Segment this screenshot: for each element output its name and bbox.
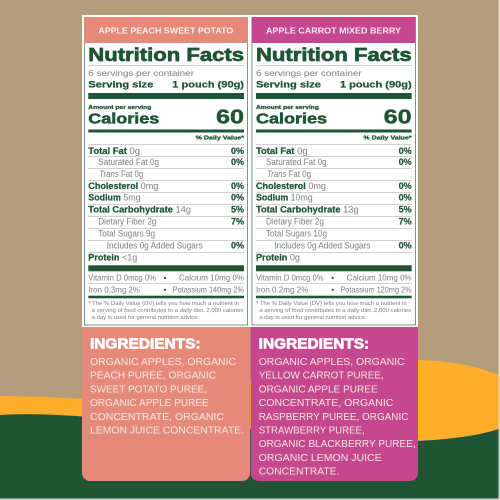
nutrient rows right (256, 146, 412, 263)
panel: ingredients apple carrot mixed berry (251, 320, 418, 481)
nutrient rows right: Includes 0g Added Sugars (274, 241, 371, 251)
footnote right (256, 301, 412, 321)
header band right (252, 17, 416, 43)
vitamins right: Calcium 10mg 0% (347, 273, 412, 283)
panel: nutrition facts apple peach sweet potato (84, 17, 248, 325)
nutrient rows left: Sodium 5mg (88, 193, 141, 203)
nutrient rows left: Total Fat 0g (88, 146, 140, 156)
ingredients text right: RASPBERRY PUREE, ORGANIC (259, 411, 409, 423)
vitamins left: Potassium 140mg 2% (173, 285, 245, 295)
ingredients text left: PEACH PUREE, ORGANIC (90, 370, 216, 382)
calories right: Amount per serving (256, 105, 319, 111)
footnote right: * The % Daily Value (DV) tells you how much a nutrient in (256, 301, 407, 307)
nutrient rows left: Total Sugars 9g (98, 229, 155, 239)
servings right: 6 servings per container (256, 68, 362, 78)
serving size left: 1 pouch (90g) (172, 79, 244, 89)
nutrient rows left: Trans Fat 0g (99, 169, 143, 179)
calories left (88, 105, 244, 142)
vitamins right: Vitamin D 0mcg 0% (256, 273, 324, 283)
heading: ingredients right: INGREDIENTS: (259, 335, 369, 352)
ingredients text right: ORGANIC BLACKBERRY PUREE, (259, 438, 416, 450)
ingredients text left: SWEET POTATO PUREE, (90, 383, 207, 395)
calories right: 60 (384, 107, 412, 129)
ingredients text right: STRAWBERRY PUREE, (259, 424, 365, 436)
title left: Nutrition Facts (88, 44, 244, 65)
footnote left: a day is used for general nutrition advice. (92, 315, 199, 321)
vitamins right: • (331, 273, 334, 283)
ingredients text right: CONCENTRATE, ORGANIC (259, 397, 394, 409)
servings left: 6 servings per container (88, 68, 194, 78)
calories left: Calories (88, 112, 159, 128)
footnote left: a serving of food contributes to a daily diet. 2,000 calories (92, 308, 244, 314)
vitamins right (256, 273, 412, 295)
heading: ingredients left: INGREDIENTS: (90, 335, 200, 352)
nutrient rows right: 0% (399, 146, 412, 156)
nutrient rows left: Protein <1g (88, 253, 137, 263)
footnote left (88, 301, 244, 321)
header band left: APPLE PEACH SWEET POTATO (98, 25, 234, 35)
vitamins right: Potassium 120mg 2% (340, 285, 412, 295)
nutrient rows left: 0% (231, 181, 244, 191)
calories left: Amount per serving (88, 105, 151, 111)
nutrient rows right: Total Fat 0g (256, 146, 308, 156)
nutrient rows right: Dietary Fiber 2g (266, 217, 324, 227)
panel: ingredients apple peach sweet potato (82, 320, 250, 481)
ingredients text left: ORGANIC APPLES, ORGANIC (90, 356, 236, 368)
calories left: 60 (216, 107, 244, 129)
vitamins left: Vitamin D 0mcg 0% (88, 273, 157, 283)
nutrient rows right: 0% (399, 181, 412, 191)
ingredients text left (90, 356, 244, 436)
nutrient rows left: 0% (231, 157, 244, 167)
serving size right (256, 79, 412, 89)
vitamins left: Calcium 10mg 0% (179, 273, 245, 283)
nutrient rows right: Trans Fat 0g (267, 169, 311, 179)
title right: Nutrition Facts (256, 44, 412, 65)
header band right: APPLE CARROT MIXED BERRY (266, 25, 401, 35)
nutrient rows right: 0% (399, 157, 412, 167)
ingredients text right: ORGANIC APPLE PUREE (259, 383, 378, 395)
ingredients text right: ORGANIC LEMON JUICE (259, 452, 382, 464)
nutrient rows right: Saturated Fat 0g (266, 157, 327, 167)
thick bars right (256, 93, 412, 298)
ingredients text right (259, 356, 416, 478)
nutrient rows left: Total Carbohydrate 14g (88, 205, 191, 215)
serving size right: 1 pouch (90g) (340, 79, 412, 89)
nutrient rows left: 7% (231, 217, 244, 227)
ingredients text left: ORGANIC APPLE PUREE (90, 397, 209, 409)
rules right (256, 65, 412, 283)
nutrient rows right: Total Carbohydrate 13g (256, 205, 359, 215)
ingredients text right: ORGANIC APPLES, ORGANIC (259, 356, 405, 368)
nutrient rows right: 5% (399, 205, 412, 215)
nutrient rows left (88, 146, 244, 263)
vitamins right: Iron 0.2mg 2% (256, 285, 309, 295)
vitamins right: • (331, 285, 334, 295)
nutrient rows left: Includes 0g Added Sugars (107, 241, 203, 251)
calories left: % Daily Value* (196, 136, 244, 142)
panel: nutrition facts apple carrot mixed berry (252, 17, 416, 325)
ingredients text right: CONCENTRATE. (259, 466, 339, 478)
footnote left: * The % Daily Value (DV) tells you how much a nutrient in (88, 301, 239, 307)
nutrient rows left: Dietary Fiber 2g (98, 217, 156, 227)
footnote right: a serving of food contributes to a daily diet. 2,000 calories (259, 308, 412, 314)
vitamins left: • (164, 285, 167, 295)
rules left (88, 65, 244, 283)
vitamins left: • (164, 273, 167, 283)
label border left (84, 17, 248, 325)
nutrient rows left: 0% (231, 241, 244, 251)
serving size left (88, 79, 244, 89)
calories right: Calories (256, 112, 327, 128)
nutrient rows left: 0% (231, 193, 244, 203)
white card backing (82, 15, 418, 327)
nutrient rows left: 0% (231, 146, 244, 156)
nutrient rows left: Cholesterol 0mg (88, 181, 158, 191)
footnote right: a day is used for general nutrition advice. (259, 315, 367, 321)
nutrient rows right: 0% (399, 193, 412, 203)
nutrient rows right: Protein 0g (256, 253, 300, 263)
vitamins left (88, 273, 245, 295)
nutrient rows right: 7% (399, 217, 412, 227)
nutrient rows right: 0% (399, 241, 412, 251)
ingredients text left: CONCENTRATE, ORGANIC (90, 411, 224, 423)
ingredients text left: LEMON JUICE CONCENTRATE. (90, 424, 244, 436)
serving size left: Serving size (88, 79, 153, 89)
calories right: % Daily Value* (363, 136, 412, 142)
nutrient rows right: Cholesterol 0mg (256, 181, 326, 191)
header band left (84, 17, 248, 43)
nutrient rows left: 5% (231, 205, 244, 215)
serving size right: Serving size (256, 79, 321, 89)
thick bars left (88, 93, 244, 298)
ingredients text right: YELLOW CARROT PUREE, (259, 370, 384, 382)
nutrient rows right: Sodium 10mg (256, 193, 313, 203)
label border right (252, 17, 415, 325)
calories right (256, 105, 412, 142)
nutrient rows right: Total Sugars 10g (266, 229, 327, 239)
nutrient rows left: Saturated Fat 0g (98, 157, 159, 167)
vitamins left: Iron 0.3mg 2% (88, 285, 141, 295)
